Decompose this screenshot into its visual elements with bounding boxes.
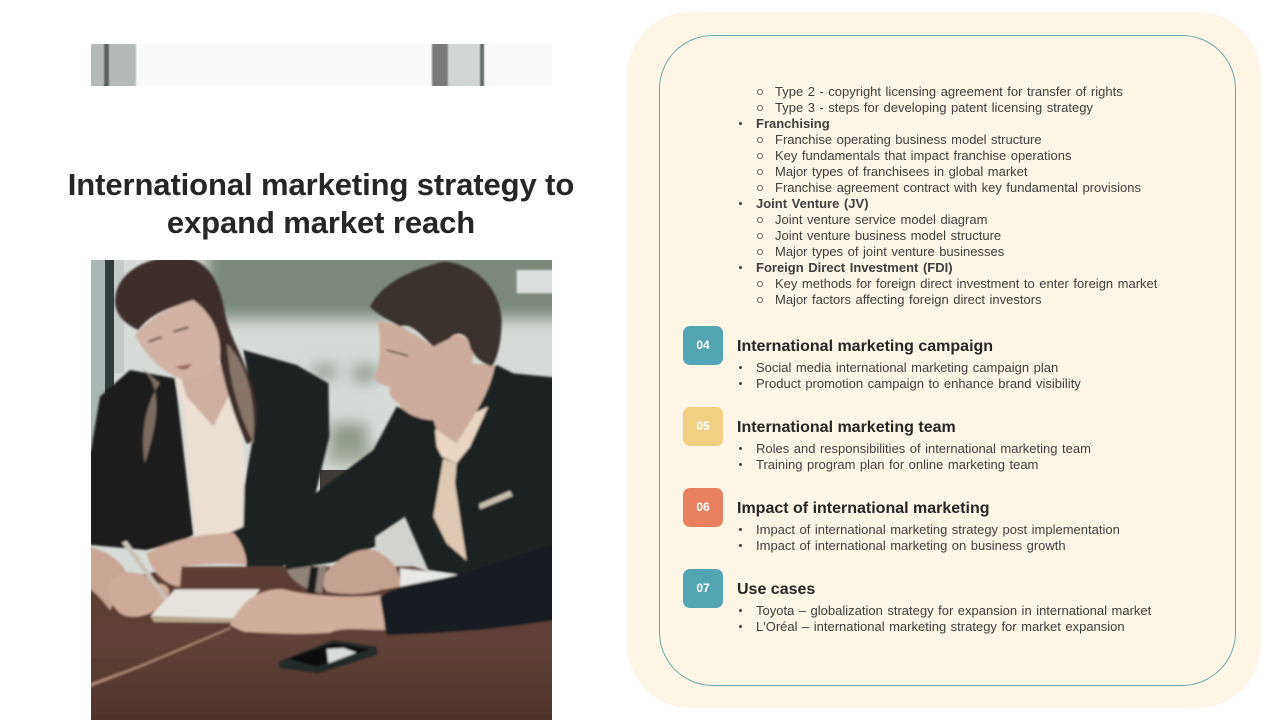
badge: 06: 06 <box>696 500 710 514</box>
title: International marketing strategy to <box>68 167 574 202</box>
woman jacket <box>80 370 193 550</box>
phone <box>278 640 378 673</box>
badge: 07: 07 <box>696 581 710 595</box>
text block: impact items: Impact of international marketing on business growth <box>756 538 1066 553</box>
panel: agenda background <box>627 12 1261 708</box>
text block: licensing, franchising, JV and FDI list: Franchise operating business model structure <box>775 132 1042 147</box>
text block: campaign items: Social media international marketing campaign plan <box>756 360 1058 375</box>
text block: licensing, franchising, JV and FDI list: Joint Venture (JV) <box>756 196 869 211</box>
text block: use case items: Toyota – globalization strategy for expansion in international market <box>756 603 1151 618</box>
text block: impact items: Impact of international marketing strategy post implementation <box>756 522 1120 537</box>
text block: licensing, franchising, JV and FDI list: Key fundamentals that impact franchise operations <box>775 148 1071 163</box>
photo: two colleagues working at a table <box>91 260 552 720</box>
badge: 07 <box>683 569 723 608</box>
text block: licensing, franchising, JV and FDI list: Major types of joint venture businesses <box>775 244 1004 259</box>
panel: agenda inner outline <box>659 35 1236 686</box>
man hair <box>370 262 502 367</box>
man shirt <box>435 407 488 463</box>
heading: Use cases: Use cases <box>737 581 815 598</box>
table <box>80 567 563 720</box>
heading: International marketing team: International marketing team <box>737 419 956 436</box>
woman arms <box>80 545 127 610</box>
notebook <box>151 589 260 620</box>
man far hand and watch <box>320 549 400 594</box>
text block: licensing, franchising, JV and FDI list: Joint venture business model structure <box>775 228 1001 243</box>
text block: impact items <box>739 522 1120 553</box>
text block: team items: Training program plan for online marketing team <box>756 457 1038 472</box>
text block: licensing, franchising, JV and FDI list: Major factors affecting foreign direct investors <box>775 292 1042 307</box>
woman hair <box>115 257 257 444</box>
man near arm <box>230 589 385 634</box>
man jacket <box>280 365 563 635</box>
badge: 04 <box>683 326 723 365</box>
heading: International marketing campaign: International marketing campaign <box>737 338 993 355</box>
title <box>68 167 574 240</box>
badge: 04: 04 <box>696 338 710 352</box>
text block: use case items <box>739 603 1152 634</box>
white paper <box>400 568 460 587</box>
pen <box>122 541 175 610</box>
heading: Impact of international marketing: Impact of international marketing <box>737 500 989 517</box>
text block: licensing, franchising, JV and FDI list: Franchise agreement contract with key fundamental provisions <box>775 180 1141 195</box>
text block: licensing, franchising, JV and FDI list: Key methods for foreign direct investment to enter foreign market <box>775 276 1157 291</box>
woman face <box>135 300 220 379</box>
woman shirt <box>175 378 245 536</box>
badge: 06 <box>683 488 723 527</box>
woman neck <box>177 363 235 427</box>
text block: use case items: L'Oréal – international marketing strategy for market expansion <box>756 619 1125 634</box>
text block: campaign items <box>739 360 1081 391</box>
text block: licensing, franchising, JV and FDI list: Franchising <box>756 116 830 131</box>
text block: licensing, franchising, JV and FDI list: Joint venture service model diagram <box>775 212 987 227</box>
text block: licensing, franchising, JV and FDI list: Type 3 - steps for developing patent licensing strategy <box>775 100 1093 115</box>
photo strip: window top <box>91 44 486 86</box>
text block: team items: Roles and responsibilities of international marketing team <box>756 441 1091 456</box>
text block: licensing, franchising, JV and FDI list <box>739 84 1158 307</box>
man neck and face <box>375 322 495 443</box>
title: expand market reach <box>167 205 475 240</box>
text block: licensing, franchising, JV and FDI list: Type 2 - copyright licensing agreement for transfer of rights <box>775 84 1123 99</box>
pocket square <box>479 491 513 509</box>
text block: team items <box>739 441 1091 472</box>
text block: campaign items: Product promotion campaign to enhance brand visibility <box>756 376 1081 391</box>
text block: licensing, franchising, JV and FDI list: Foreign Direct Investment (FDI) <box>756 260 953 275</box>
badge: 05 <box>683 407 723 446</box>
badge: 05: 05 <box>696 419 710 433</box>
text block: licensing, franchising, JV and FDI list: Major types of franchisees in global market <box>775 164 1028 179</box>
